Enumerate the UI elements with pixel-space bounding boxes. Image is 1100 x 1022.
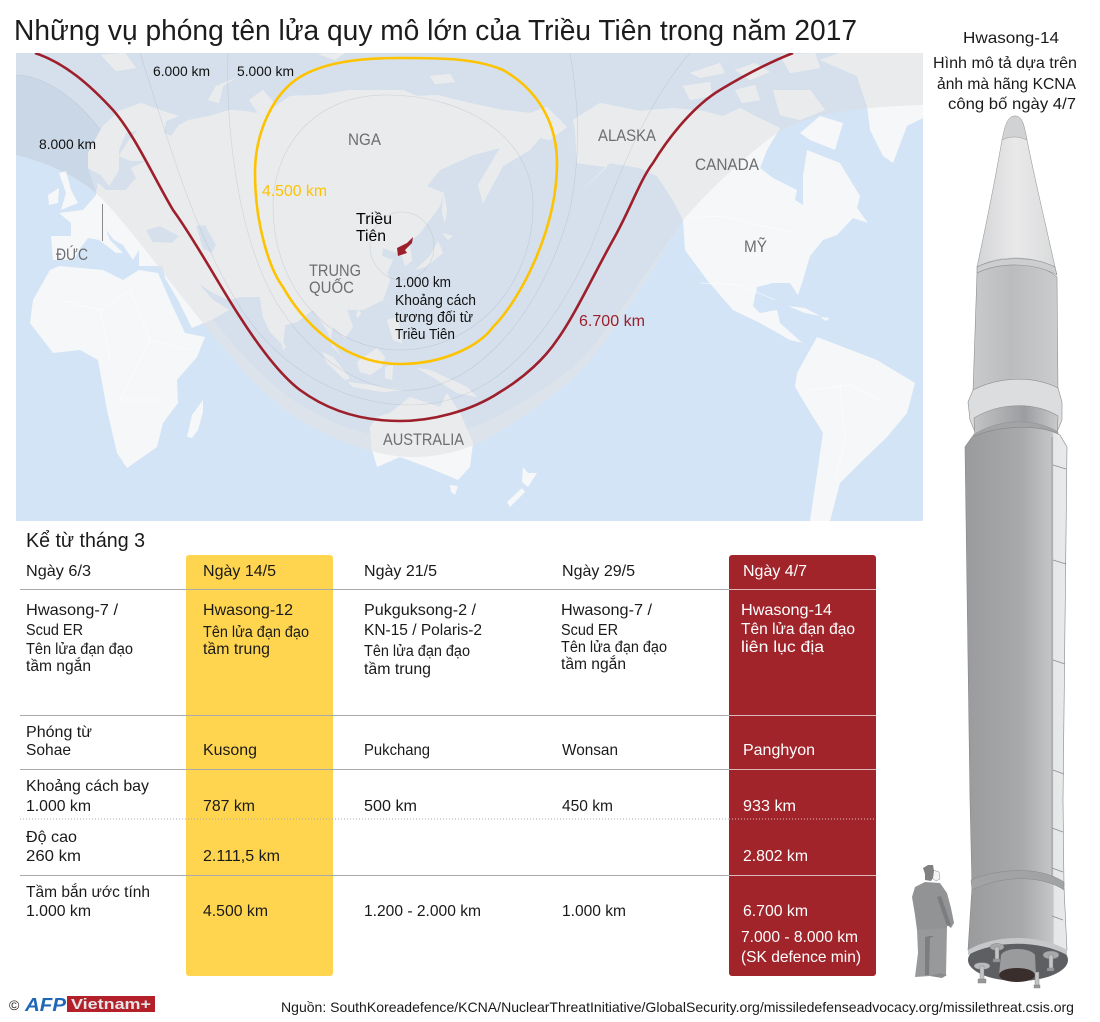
column highlight: Hwasong-12 <box>186 555 333 976</box>
table column: Ngày 14/5 <box>203 563 309 920</box>
table column: Ngày 4/7: Panghyon <box>743 742 815 759</box>
table column: Ngày 4/7: Hwasong-14 <box>741 602 832 619</box>
table column: Ngày 29/5: Ngày 29/5 <box>562 563 635 580</box>
label: Triều Tiên <box>356 211 392 245</box>
rocket: collar <box>968 379 1062 432</box>
rocket: lower skirt <box>968 875 1067 965</box>
table column: row labels and Ngày 6/3: 1.000 km <box>26 903 91 920</box>
table column: Ngày 29/5: Hwasong-7 / <box>561 602 653 619</box>
table column: Ngày 29/5: tầm ngắn <box>561 656 626 673</box>
table column: Ngày 4/7: 6.700 km <box>743 903 808 920</box>
distance labels <box>39 63 294 152</box>
table column: Ngày 4/7: 2.802 km <box>743 848 808 865</box>
country labels: MỸ <box>744 237 767 256</box>
table column: row labels and Ngày 6/3: Tầm bắn ước tính <box>26 882 150 901</box>
range zone: outer 8.000 km shade over ocean <box>158 227 678 451</box>
table column: Ngày 4/7: (SK defence min) <box>741 949 861 966</box>
country labels: QUỐC <box>309 277 354 297</box>
table heading: Kể từ tháng 3 <box>26 530 145 552</box>
person: shoe <box>930 973 947 978</box>
table column: Ngày 14/5: tầm trung <box>203 641 270 658</box>
table column: Ngày 14/5: 2.111,5 km <box>203 848 280 865</box>
table column: Ngày 21/5: KN-15 / Polaris-2 <box>364 622 482 639</box>
person: legs <box>915 927 947 977</box>
table column: row labels and Ngày 6/3: Sohae <box>26 742 71 759</box>
table column: row labels and Ngày 6/3: Phóng từ <box>26 724 92 741</box>
label: Triều Tiên: Triều <box>356 211 392 228</box>
table column: row labels and Ngày 6/3: Hwasong-7 / <box>26 602 119 619</box>
label: 1.000 km note: tương đối từ <box>395 309 473 326</box>
table column: Ngày 29/5: 450 km <box>562 798 613 815</box>
rocket caption: ảnh mà hãng KCNA <box>937 76 1076 93</box>
logo: Vietnam+: Vietnam+ <box>71 996 151 1013</box>
distance labels: 8.000 km <box>39 136 96 152</box>
map panel <box>16 53 923 521</box>
label: 1.000 km note: Triều Tiên <box>395 326 455 343</box>
land inside range <box>64 53 923 457</box>
table column: Ngày 21/5: Pukchang <box>364 742 430 759</box>
country labels <box>56 126 767 449</box>
table column: Ngày 21/5: Tên lửa đạn đạo <box>364 643 470 660</box>
table column: Ngày 14/5: 787 km <box>203 798 255 815</box>
icon: North Korea shape <box>397 237 413 256</box>
table column: Ngày 29/5: Scud ER <box>561 622 618 639</box>
rocket: base plate <box>968 939 1068 981</box>
rocket illustration <box>965 116 1068 988</box>
footer: copyright and logo: © <box>9 997 20 1013</box>
table column: Ngày 4/7 <box>741 563 861 966</box>
table column: row labels and Ngày 6/3 <box>26 563 150 920</box>
rocket caption: Hình mô tả dựa trên <box>933 55 1077 72</box>
country labels: ĐỨC <box>56 245 88 264</box>
country labels: ALASKA <box>598 126 657 145</box>
table column: Ngày 29/5: Tên lửa đạn đạo <box>561 639 667 656</box>
table column: row labels and Ngày 6/3: Ngày 6/3 <box>26 563 91 580</box>
range curve: Hwasong-14 6.700 km <box>35 53 793 421</box>
table column: row labels and Ngày 6/3: tầm ngắn <box>26 658 91 675</box>
country labels: CANADA <box>695 155 760 174</box>
label: 1.000 km note: 1.000 km <box>395 274 451 291</box>
table lines <box>20 590 876 876</box>
distance labels: 6.000 km <box>153 63 210 79</box>
rocket caption: Hwasong-14 <box>963 30 1059 47</box>
table column: row labels and Ngày 6/3: Độ cao <box>26 829 77 846</box>
distance labels: 5.000 km <box>237 63 294 79</box>
marker line for Germany <box>102 204 103 241</box>
table column: Ngày 21/5: 500 km <box>364 798 417 815</box>
title: Những vụ phóng tên lửa quy mô lớn của Triều Tiên trong năm 2017 <box>14 15 857 47</box>
table column: Ngày 29/5: Wonsan <box>562 742 618 759</box>
rocket: nozzle <box>999 949 1036 975</box>
ocean <box>16 108 923 521</box>
rocket: fins <box>974 944 1059 988</box>
footer: copyright and logo <box>9 995 155 1015</box>
label: 4.500 km: 4.500 km <box>262 183 327 200</box>
source note: Nguồn: SouthKoreadefence/KCNA/NuclearThreatInitiative/GlobalSecurity.org/missiledefenseadvocacy.org/missilethreat.csis.org <box>281 999 1074 1015</box>
dark zone top-left <box>16 75 100 193</box>
rocket caption: công bố ngày 4/7 <box>948 96 1076 113</box>
table column: Ngày 4/7: 7.000 - 8.000 km <box>741 929 858 946</box>
table column: Ngày 4/7: Ngày 4/7 <box>743 563 807 580</box>
rocket: nose tip <box>1002 116 1027 140</box>
person: head <box>932 870 940 881</box>
table column: Ngày 4/7: 933 km <box>743 798 796 815</box>
range rings <box>16 53 690 405</box>
table column: Ngày 14/5: Hwasong-12 <box>203 602 293 619</box>
table column: Ngày 21/5: tầm trung <box>364 661 431 678</box>
label: 1.000 km note: Khoảng cách <box>395 292 476 309</box>
rocket: main body <box>965 427 1067 887</box>
land white <box>30 53 923 521</box>
country borders <box>700 282 775 300</box>
table column: Ngày 21/5: Ngày 21/5 <box>364 563 437 580</box>
person silhouette for scale <box>912 865 954 978</box>
table column: Ngày 29/5: 1.000 km <box>562 903 626 920</box>
table column: row labels and Ngày 6/3: Khoảng cách bay <box>26 778 149 795</box>
person: torso <box>912 882 954 930</box>
table column: Ngày 21/5: Pukguksong-2 / <box>364 602 477 619</box>
table column: Ngày 21/5: 1.200 - 2.000 km <box>364 903 481 920</box>
label: 6.700 km: 6.700 km <box>579 313 645 330</box>
table column: Ngày 14/5: Kusong <box>203 742 257 759</box>
country labels: TRUNG <box>309 261 361 280</box>
table column: row labels and Ngày 6/3: 260 km <box>26 848 81 865</box>
country labels: NGA <box>348 130 382 149</box>
label: 1.000 km note <box>395 274 476 343</box>
table column: Ngày 21/5 <box>364 563 482 920</box>
table column: row labels and Ngày 6/3: Scud ER <box>26 622 83 639</box>
table column: Ngày 14/5: 4.500 km <box>203 903 268 920</box>
rocket: side panel lines <box>1052 437 1066 940</box>
rocket caption <box>933 30 1077 113</box>
rocket: nose cone <box>977 116 1055 267</box>
country labels: AUSTRALIA <box>383 430 465 449</box>
table column: Ngày 4/7: Tên lửa đạn đạo <box>741 621 855 638</box>
label: Triều Tiên: Tiên <box>356 228 386 245</box>
table column: Ngày 14/5: Tên lửa đạn đạo <box>203 624 309 641</box>
rocket: upper stage <box>973 262 1058 392</box>
range curve: Hwasong-12 4.500 km <box>255 58 557 364</box>
table column: Ngày 29/5 <box>561 563 667 920</box>
map labels <box>39 63 767 449</box>
column highlight: Hwasong-14 <box>729 555 876 976</box>
table column: Ngày 4/7: liên lục địa <box>741 639 824 656</box>
table column: row labels and Ngày 6/3: 1.000 km <box>26 798 91 815</box>
range zone: inner shade over ocean <box>16 53 923 438</box>
logo: AFP: AFP <box>24 995 67 1015</box>
table column: Ngày 14/5: Ngày 14/5 <box>203 563 276 580</box>
table column: row labels and Ngày 6/3: Tên lửa đạn đạo <box>26 641 133 658</box>
